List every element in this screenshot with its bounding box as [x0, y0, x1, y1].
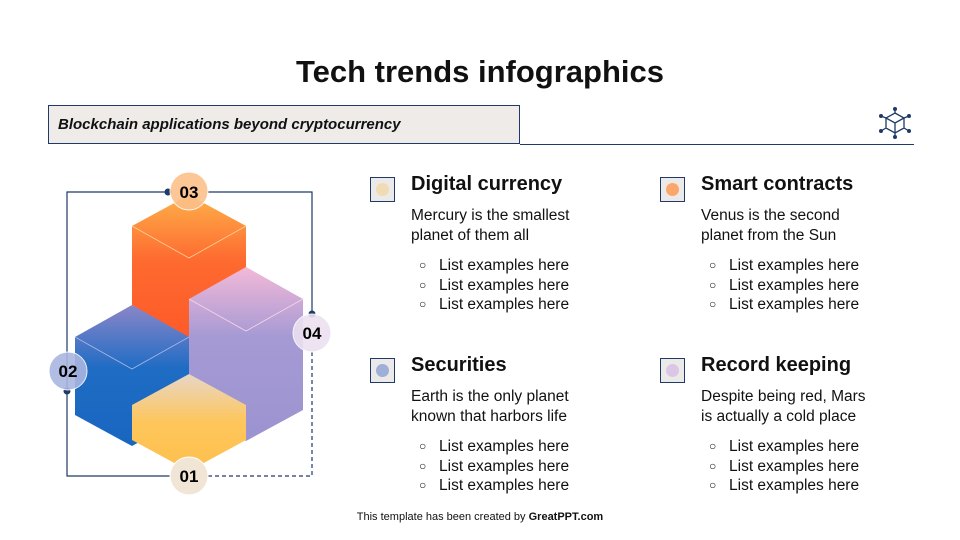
- badge 02: 02: [59, 362, 77, 381]
- text: List examples here: [729, 438, 859, 455]
- text: List examples here: [439, 458, 569, 474]
- subtitle box: [48, 105, 520, 144]
- text: List examples here: [729, 257, 859, 274]
- panel: digital currency: [370, 173, 570, 313]
- text: Securities: [411, 354, 507, 376]
- badge 01: [170, 457, 208, 495]
- text: Venus is the second: [701, 207, 840, 224]
- text: is actually a cold place: [701, 408, 856, 424]
- text: planet of them all: [411, 226, 529, 244]
- text: List examples here: [729, 458, 859, 474]
- badge 02: [49, 352, 87, 390]
- frame lines: [67, 192, 312, 476]
- badge 03: 03: [180, 183, 198, 202]
- cube 01 yellow: [132, 374, 246, 471]
- text: Digital currency: [411, 173, 562, 195]
- text: List examples here: [439, 276, 569, 294]
- footer: This template has been created by GreatPPT.com: [357, 511, 603, 523]
- cube 04 purple: [189, 267, 303, 441]
- title: Tech trends infographics: [296, 54, 664, 89]
- text: List examples here: [439, 257, 569, 274]
- badge 04: 04: [303, 324, 322, 343]
- text: List examples here: [729, 296, 859, 313]
- text: Earth is the only planet: [411, 388, 569, 405]
- badge 04: [293, 314, 331, 352]
- icon: blockchain: [879, 107, 911, 139]
- badge 01: 01: [180, 467, 198, 486]
- text: Smart contracts: [701, 173, 853, 195]
- text: List examples here: [439, 296, 569, 313]
- text: planet from the Sun: [701, 226, 836, 244]
- markers: [64, 188, 316, 394]
- text: Despite being red, Mars: [701, 388, 866, 405]
- panel: smart contracts: [660, 173, 859, 313]
- text: List examples here: [729, 276, 859, 294]
- text: Record keeping: [701, 354, 851, 376]
- text: List examples here: [729, 477, 859, 494]
- text: Mercury is the smallest: [411, 207, 569, 224]
- text: List examples here: [439, 438, 569, 455]
- cube 02 blue: [75, 305, 189, 446]
- panel: record keeping: [660, 354, 866, 494]
- text: known that harbors life: [411, 408, 567, 424]
- text: List examples here: [439, 477, 569, 494]
- cube diagram: [50, 172, 330, 494]
- cube 03 orange: [132, 195, 246, 340]
- subtitle box: Blockchain applications beyond cryptocurrency: [58, 116, 401, 133]
- panel: securities: [370, 354, 569, 494]
- badge 03: [170, 172, 208, 210]
